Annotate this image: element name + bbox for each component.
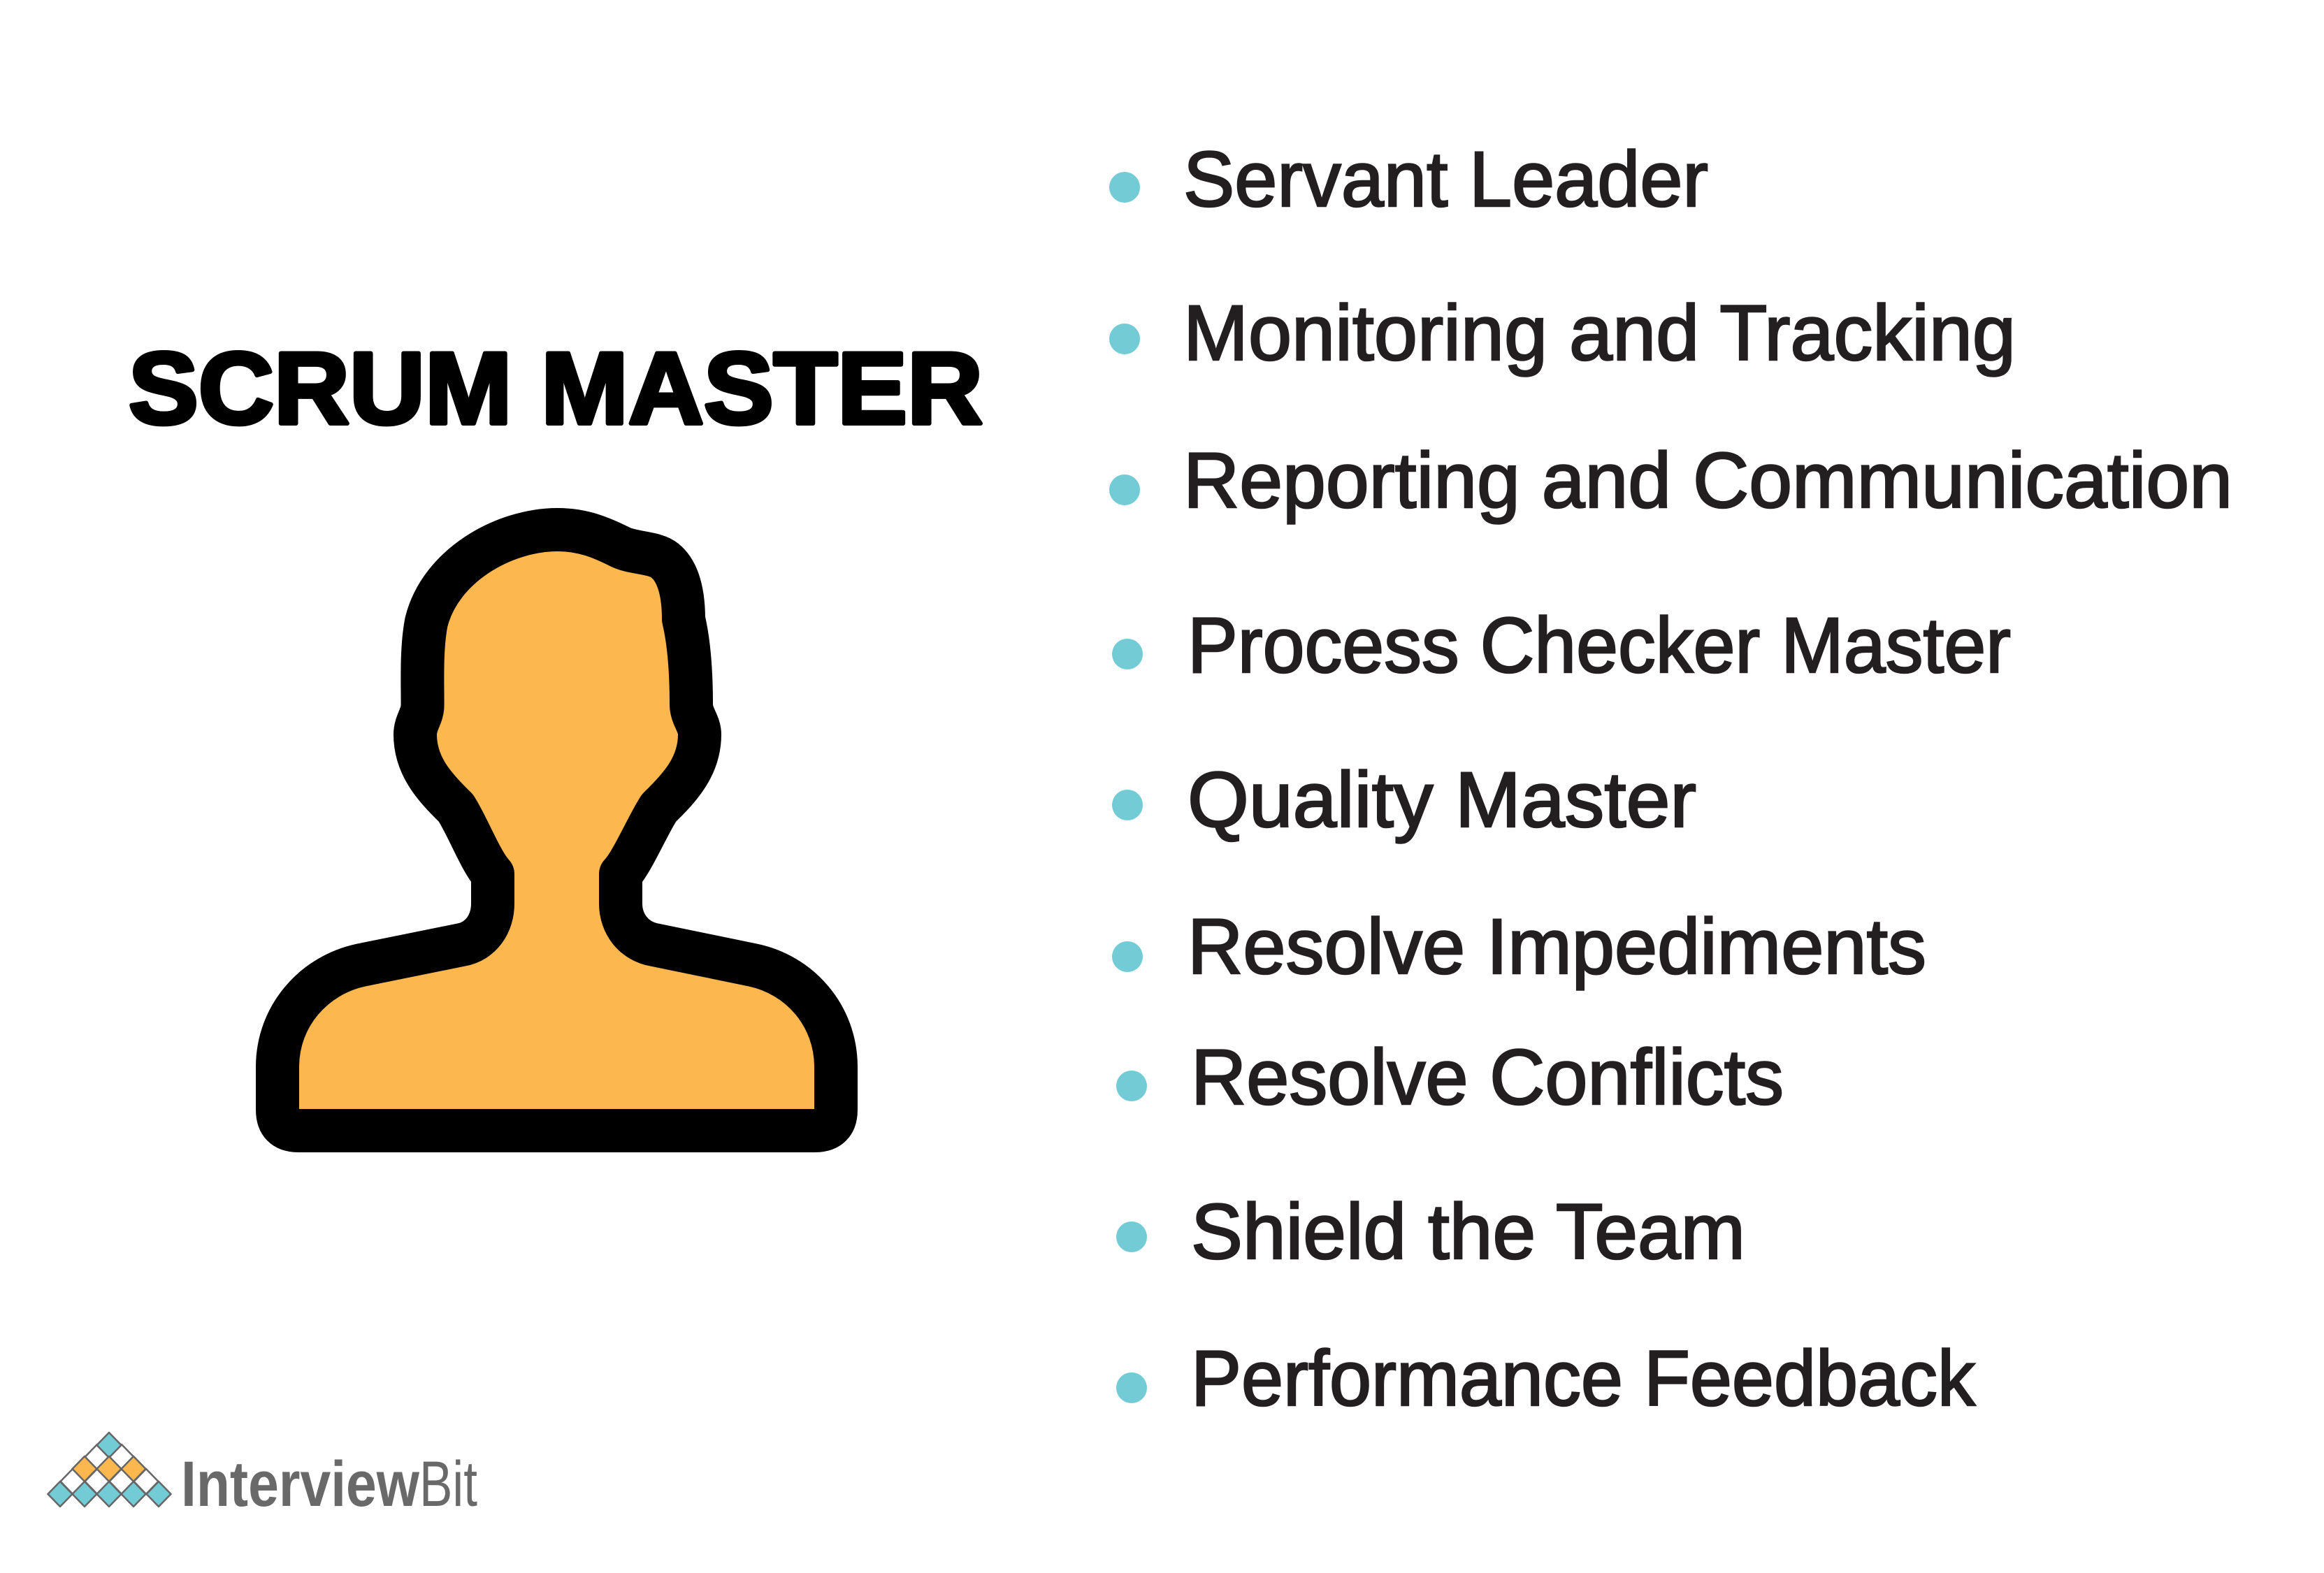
logo wordmark: Bit <box>419 1449 477 1520</box>
item: Reporting and Communication: Reporting and Communication <box>1183 437 2232 524</box>
logo: InterviewBit <box>48 1433 477 1520</box>
item: Shield the Team: Shield the Team <box>1191 1188 1745 1275</box>
item: Monitoring and Tracking: Monitoring and Tracking <box>1183 289 2016 377</box>
item: Servant Leader: Servant Leader <box>1183 136 1708 223</box>
icon: diamond pyramid <box>48 1433 171 1507</box>
item: Process Checker Master: Process Checker Master <box>1188 602 2011 689</box>
item: Quality Master: Quality Master <box>1188 756 1696 843</box>
logo wordmark: Interview <box>181 1449 419 1520</box>
title: SCRUM MASTER <box>129 331 983 445</box>
list: scrum master responsibilities <box>1109 136 2232 1422</box>
item: Resolve Conflicts: Resolve Conflicts <box>1191 1034 1784 1121</box>
item: Resolve Impediments: Resolve Impediments <box>1188 903 1926 990</box>
item: Performance Feedback: Performance Feedback <box>1191 1335 1976 1422</box>
icon: person silhouette <box>277 530 836 1131</box>
